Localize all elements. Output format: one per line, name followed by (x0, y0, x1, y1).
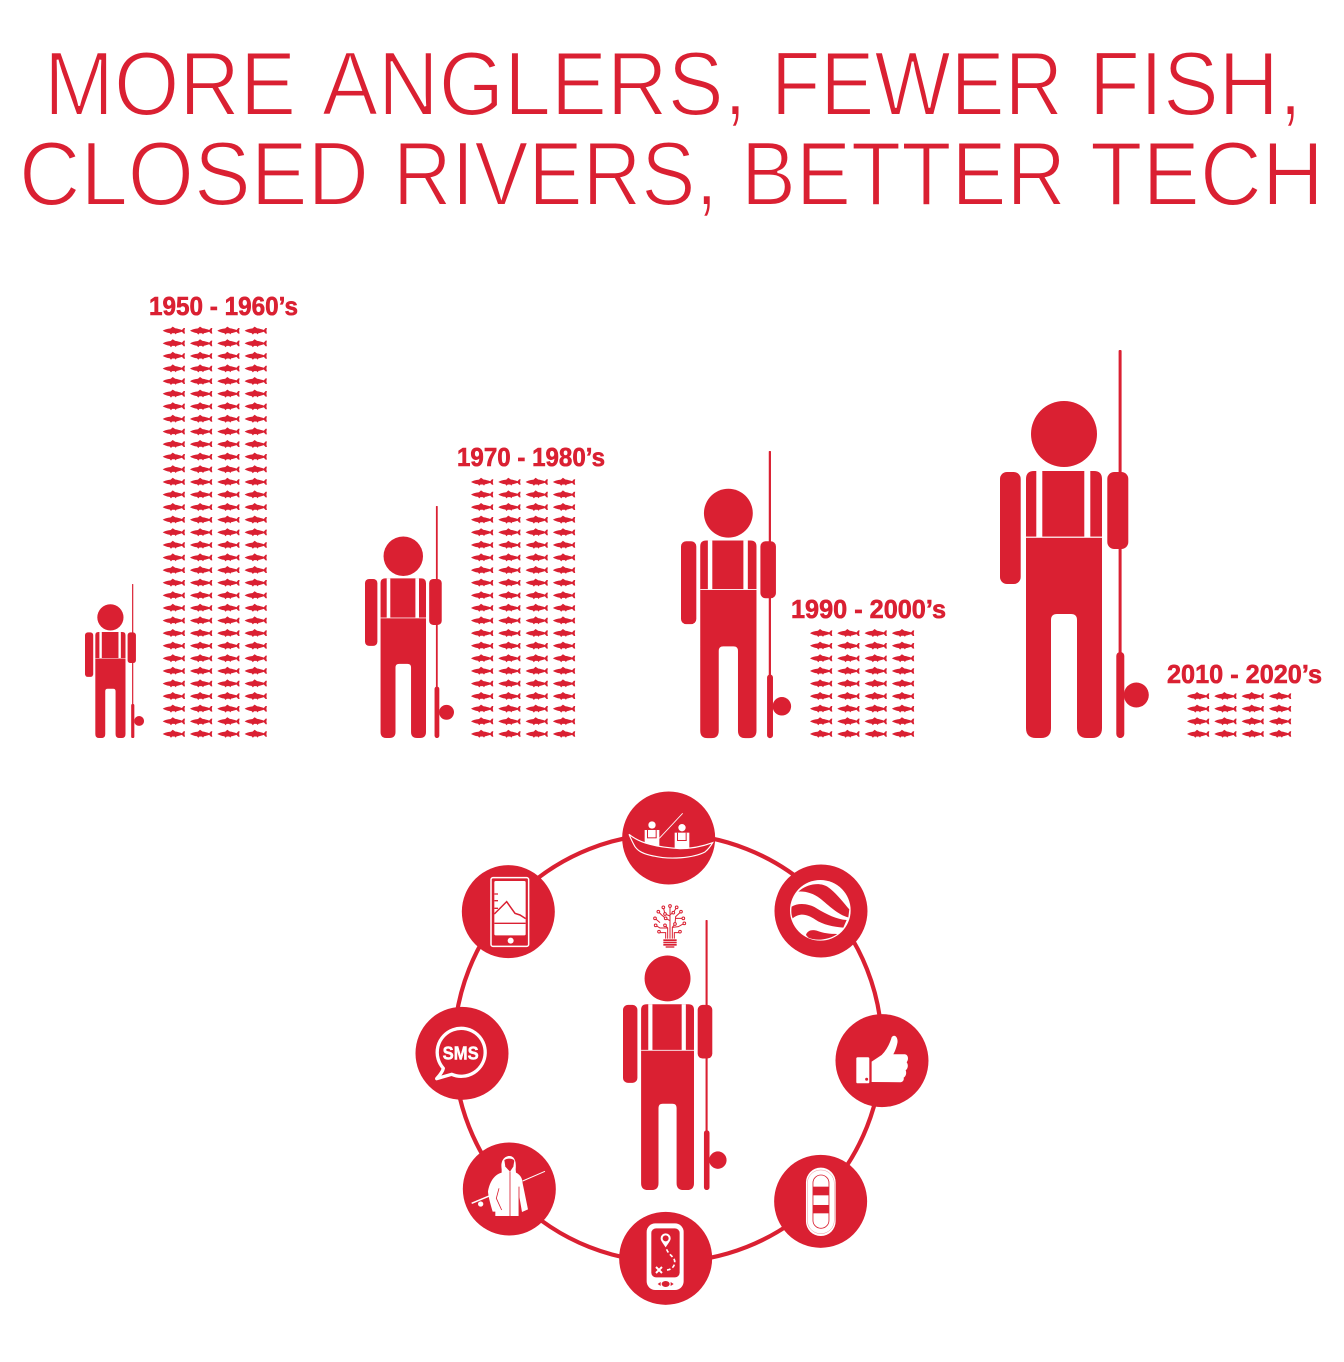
panel: 1950-1960s (85, 291, 298, 738)
title: FEWER (771, 34, 1063, 135)
title: RIVERS, (393, 124, 718, 225)
label 2010s: 2010 - 2020’s (1167, 659, 1322, 689)
angler figure 1950s (85, 584, 144, 738)
label 1990s: 1990 - 2000’s (791, 594, 946, 624)
fish count 1990s (810, 629, 914, 738)
icon: SMS bubble (415, 1007, 508, 1100)
icon: globe (774, 864, 867, 957)
label 1950s: 1950 - 1960’s (149, 291, 298, 321)
panel: 1970-1980s (365, 442, 605, 738)
title: CLOSED (19, 124, 369, 225)
panel: 1990-2000s (681, 451, 946, 738)
icon: angler jacket (463, 1142, 556, 1235)
title: TECH (1090, 124, 1324, 225)
angler figure 2010s (1000, 350, 1149, 738)
title: MORE (44, 34, 296, 135)
icon: thumbs up (835, 1014, 928, 1107)
connecting ring (454, 834, 882, 1262)
icon: GPS map device (619, 1212, 712, 1305)
fish count 1970s (471, 478, 575, 738)
title (19, 34, 1324, 225)
icon: raft (774, 1155, 867, 1248)
SMS text: SMS (443, 1042, 479, 1063)
central angler figure (623, 920, 727, 1190)
panel: technology ring (415, 791, 928, 1305)
title: FISH, (1089, 34, 1302, 135)
angler figure 1970s (365, 506, 454, 738)
fish count 2010s (1187, 692, 1291, 738)
title: BETTER (741, 124, 1066, 225)
label 1970s: 1970 - 1980’s (457, 442, 605, 472)
angler figure 1990s (681, 451, 791, 738)
icon: circuit light bulb (654, 905, 686, 948)
panel: 2010-2020s (1000, 350, 1322, 738)
fish count 1950s (163, 327, 267, 738)
icon: drift boat with anglers (622, 791, 715, 884)
icon: fish finder phone (462, 865, 555, 958)
title: ANGLERS, (322, 34, 747, 135)
